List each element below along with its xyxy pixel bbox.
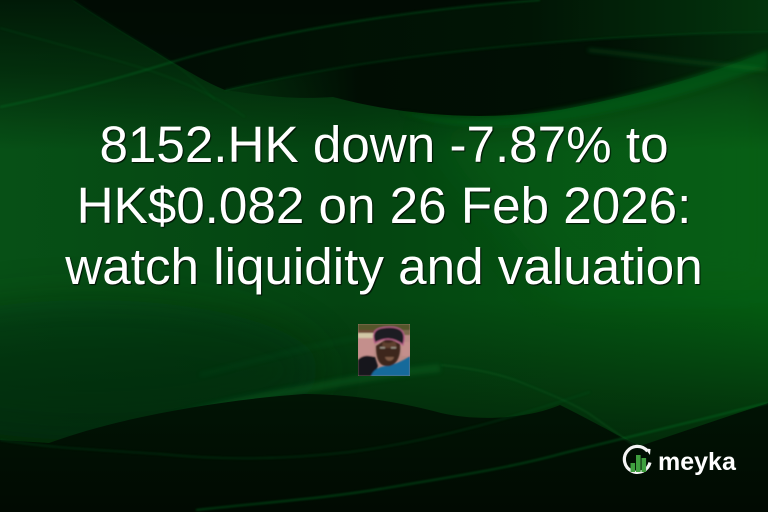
icon: meyka logo mark (622, 444, 652, 474)
soft green band across right (430, 55, 768, 290)
title: HK$0.082 on 26 Feb 2026: (77, 177, 691, 234)
title: 8152.HK down -7.87% to (99, 116, 669, 172)
icon: author avatar (358, 324, 410, 376)
title (65, 116, 703, 296)
bottom dark hill (0, 394, 768, 512)
dark lens (225, 32, 768, 116)
logo (622, 444, 736, 476)
top streaks (0, 0, 540, 107)
title: watch liquidity and valuation (65, 238, 703, 295)
top dark region (73, 0, 540, 62)
logo wordmark: meyka (658, 448, 736, 476)
mid-lower soft waves (100, 368, 440, 450)
soft dark left mid area (0, 300, 320, 440)
